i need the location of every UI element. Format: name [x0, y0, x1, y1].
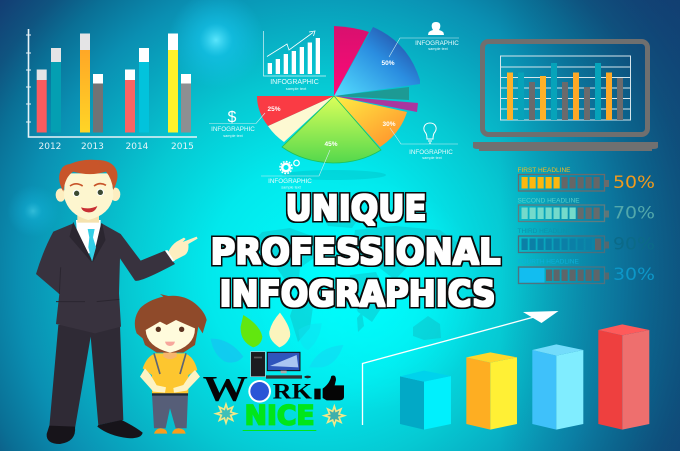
- eyes: [70, 184, 106, 197]
- laptop frame: [482, 42, 648, 134]
- year labels: 2013: [81, 142, 104, 152]
- battery: fourth headline 30 percent: FOURTH HEADLINE: [518, 258, 579, 266]
- bars 2013: [80, 34, 103, 132]
- callout: dollar: sample text: [223, 134, 244, 138]
- battery: third headline 90 percent: 90%: [613, 234, 655, 254]
- callout: gears: sample text: [281, 186, 302, 190]
- slice: blue 50 percent: [334, 27, 420, 96]
- mini bars: [268, 38, 320, 74]
- trousers: [49, 325, 123, 428]
- laptop base: [473, 142, 658, 151]
- chart axes: [26, 29, 197, 137]
- battery: first headline 50 percent: 50%: [613, 173, 655, 193]
- bars 2012: [37, 48, 61, 132]
- 3D bar: yellow: [466, 352, 517, 430]
- callout: bulb: sample text: [422, 156, 443, 160]
- year labels: [38, 142, 194, 152]
- child backpack straps: [154, 353, 186, 374]
- bars 2015: [168, 34, 191, 132]
- callout: person: INFOGRAPHIC: [415, 40, 459, 47]
- battery: second headline 70 percent: SECOND HEADLINE: [518, 198, 580, 204]
- pie chart: [257, 26, 420, 180]
- 3D bar: red: [598, 324, 649, 430]
- child arms: [140, 368, 200, 393]
- hair: [59, 160, 117, 192]
- pie percentages: 50%: [381, 60, 395, 67]
- shirt cuff: [165, 250, 175, 262]
- logo underline: [243, 429, 316, 432]
- neck: [77, 213, 99, 223]
- battery: first headline 50 percent: [518, 167, 655, 193]
- logo computer icon: [251, 352, 311, 379]
- callout: bulb: [390, 123, 458, 160]
- logo badge: [248, 380, 271, 403]
- 3D bar: cyan: [400, 371, 451, 430]
- pie percentages: [267, 60, 396, 148]
- year labels: 2015: [171, 142, 194, 152]
- face: [64, 173, 113, 220]
- shirt: [76, 220, 101, 253]
- title: PROFESSIONAL: [210, 232, 500, 273]
- callout: gears: [261, 150, 330, 190]
- battery: third headline 90 percent: [518, 228, 655, 254]
- mouth: [81, 206, 97, 212]
- slice: pink: [334, 26, 369, 96]
- title: INFOGRAPHICS: [220, 274, 496, 315]
- pie percentages: 45%: [324, 141, 338, 148]
- pie shadow: [282, 170, 386, 180]
- child hair: [135, 294, 207, 353]
- jacket: [36, 223, 175, 333]
- slice: green: [282, 96, 381, 163]
- icon: gears: [280, 160, 299, 174]
- logo ornament right: [324, 406, 344, 425]
- logo leaves: [211, 313, 343, 367]
- mini chart axes: [264, 31, 326, 76]
- logo: work nice: [203, 313, 344, 432]
- child legs: [152, 394, 188, 428]
- callout: dollar: [209, 109, 265, 138]
- logo wordmark nice: NICE: [245, 401, 315, 432]
- icon: person: [428, 22, 444, 35]
- child: [135, 294, 207, 434]
- callout: person: sample text: [428, 47, 449, 51]
- panel: yearly bar chart: [26, 29, 197, 152]
- world map watermark: [250, 204, 462, 342]
- title: [210, 189, 500, 315]
- child shoes: [154, 428, 186, 434]
- necktie: [88, 229, 96, 262]
- battery: second headline 70 percent: 70%: [613, 204, 655, 224]
- battery: fourth headline 30 percent: [518, 258, 655, 285]
- slice: purple: [334, 96, 418, 112]
- pie percentages: 25%: [267, 106, 281, 113]
- callout: dollar: INFOGRAPHIC: [211, 126, 255, 133]
- 3D bar chart: [400, 324, 649, 430]
- callout: gears: INFOGRAPHIC: [268, 178, 312, 185]
- year labels: 2012: [38, 142, 61, 152]
- battery: second headline 70 percent: [518, 198, 655, 224]
- right shoe: [97, 420, 143, 438]
- bars 2014: [125, 48, 149, 132]
- logo wordmark work: W: [203, 369, 248, 409]
- callout: person: [389, 22, 459, 57]
- jacket lapel shading: [56, 223, 119, 302]
- battery: first headline 50 percent: FIRST HEADLINE: [518, 167, 571, 174]
- logo wordmark work: RK: [273, 379, 312, 404]
- icon: thumbs up: [314, 375, 344, 400]
- child neck: [163, 350, 177, 359]
- child belt: [152, 393, 188, 396]
- 3D bar: blue: [532, 344, 583, 430]
- panel: laptop chart: [473, 42, 658, 151]
- mini chart callout: [264, 31, 326, 91]
- child eyes and mouth: [156, 327, 184, 346]
- chart grid: [500, 56, 630, 120]
- ears: [56, 188, 66, 202]
- title: UNIQUE: [286, 189, 426, 229]
- child face: [146, 320, 195, 353]
- pointing hand: [168, 237, 198, 261]
- icon: dollar sign: $: [228, 109, 237, 126]
- child shirt: [143, 353, 197, 393]
- panel: battery meters: [518, 167, 655, 285]
- pie percentages: 30%: [382, 121, 396, 128]
- year labels: 2014: [126, 142, 149, 152]
- slice: cream: [268, 96, 334, 142]
- logo ornament left: [216, 404, 236, 423]
- growth arrow: [362, 311, 558, 425]
- battery: third headline 90 percent: THIRD HEADLINE: [518, 228, 572, 235]
- arrowhead: [523, 311, 558, 323]
- slice: orange: [334, 96, 407, 147]
- battery: fourth headline 30 percent: 30%: [613, 265, 655, 285]
- icon: light bulb: [424, 123, 436, 143]
- slice: teal: [334, 87, 409, 100]
- mini chart caption: INFOGRAPHIC: [270, 79, 319, 86]
- mini trend arrow: [267, 31, 315, 56]
- mini chart callout: sample text: [286, 86, 307, 91]
- slice: red: [257, 96, 334, 126]
- logo wordmark work: [203, 369, 312, 409]
- left shoe: [47, 426, 75, 444]
- businessman: [36, 160, 198, 444]
- callout: bulb: INFOGRAPHIC: [409, 149, 453, 156]
- laptop chart bars: [507, 63, 623, 120]
